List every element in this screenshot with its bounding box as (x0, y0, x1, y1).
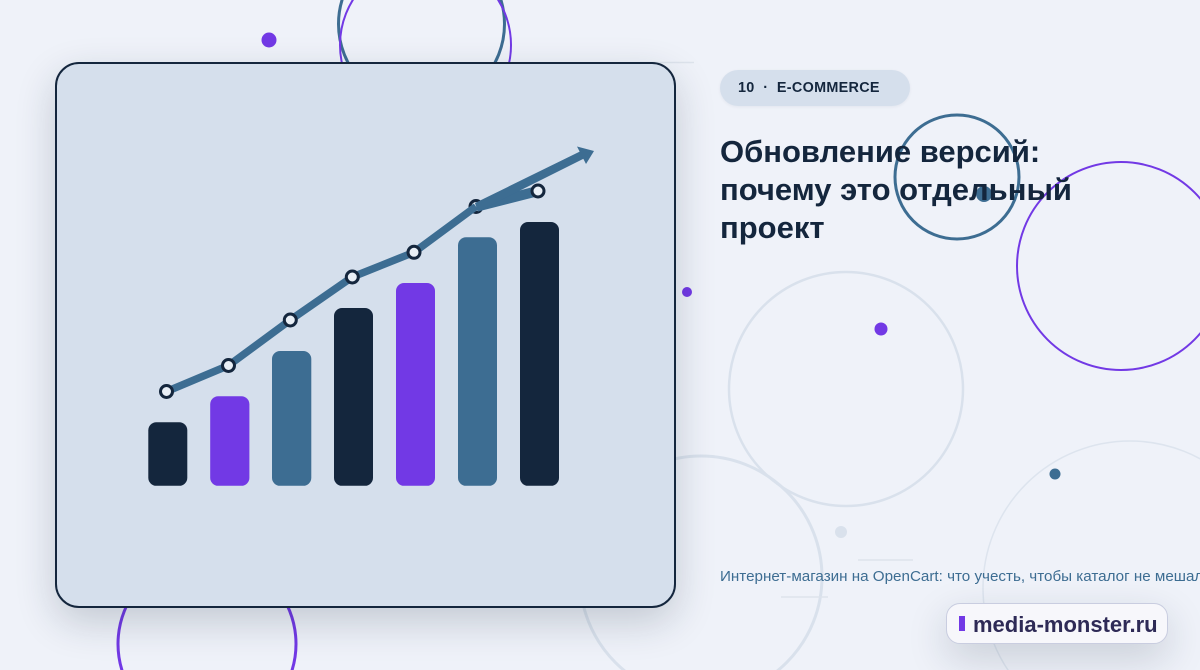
bars (148, 222, 559, 486)
trend line markers (160, 185, 544, 398)
trend line (166, 206, 476, 392)
brand mark (959, 616, 965, 631)
title: Обновление версий: (720, 134, 1040, 169)
marker behind arrow start (470, 200, 482, 212)
title (720, 134, 1072, 245)
title: почему это отдельный (720, 172, 1072, 207)
title: проект (720, 210, 825, 245)
brand label (946, 603, 1168, 644)
panel: chart card (55, 62, 676, 608)
arrow (475, 146, 594, 212)
related article text: Интернет-магазин на OpenCart: что учесть, чтобы каталог не мешал (720, 568, 1200, 585)
badge text: 10 · E-COMMERCE (738, 80, 880, 96)
brand name: media-monster.ru (973, 612, 1158, 637)
badge (720, 70, 910, 106)
